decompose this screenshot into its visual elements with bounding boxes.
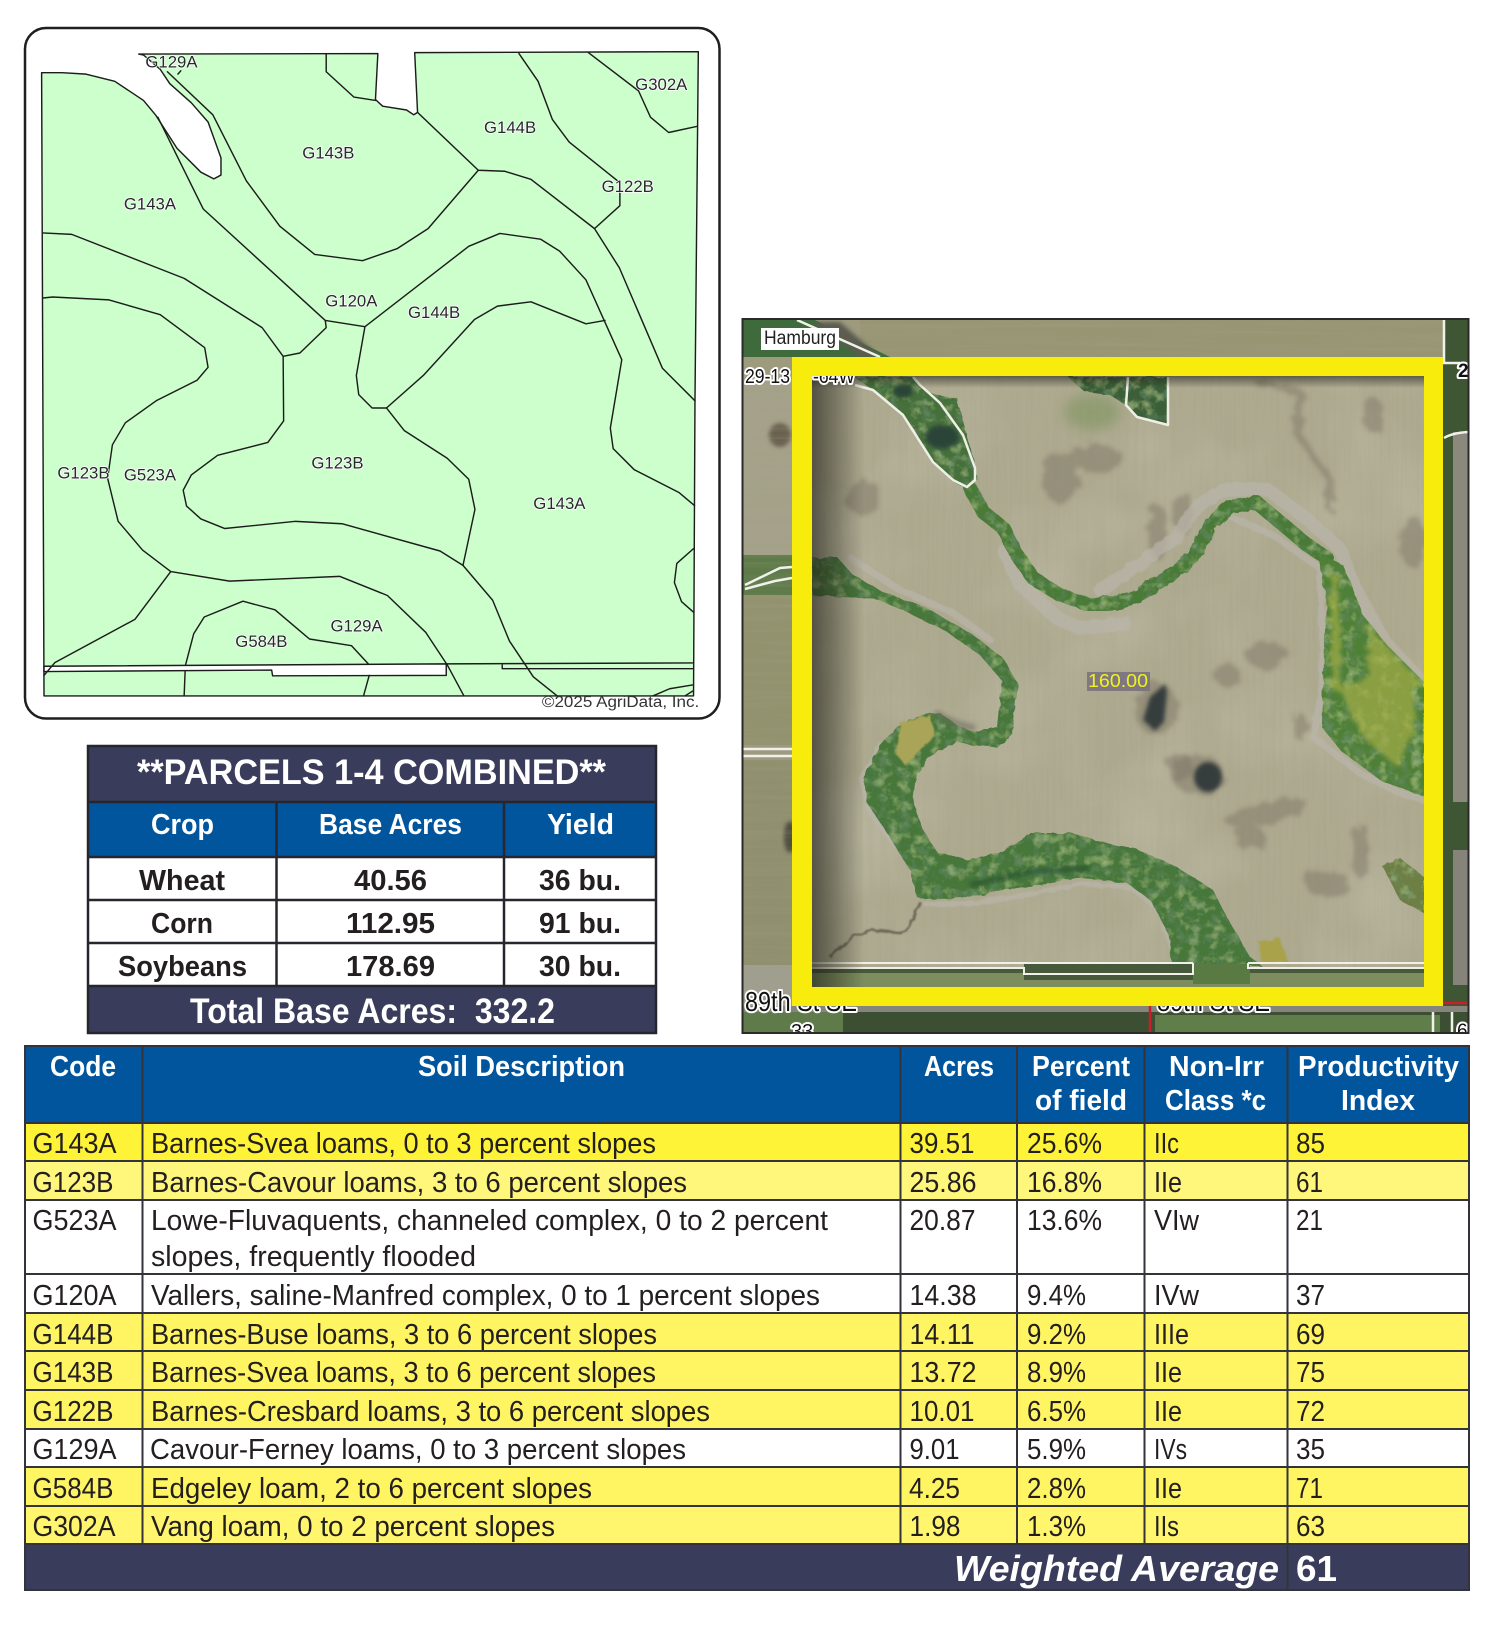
row: G584B: IIe xyxy=(1154,1473,1182,1505)
row: G144B: 14.11 xyxy=(910,1319,974,1351)
row: G584B: 2.8% xyxy=(1027,1473,1086,1505)
row: G302A xyxy=(32,1511,1325,1543)
soil code labels: G122B xyxy=(602,178,654,196)
ponds xyxy=(1143,684,1222,792)
row: G120A: 37 xyxy=(1296,1280,1325,1312)
row: G129A: Cavour-Ferney loams, 0 to 3 percent slopes xyxy=(150,1434,686,1466)
bottom strip xyxy=(843,1012,1443,1032)
row: G123B: IIe xyxy=(1154,1167,1182,1199)
row: G120A xyxy=(32,1280,1325,1312)
soil code labels: G144B xyxy=(484,119,536,137)
header labels: Class *c xyxy=(1165,1085,1266,1117)
row: wheat: Wheat xyxy=(139,865,225,897)
soil code labels: G123B xyxy=(57,464,110,482)
row: G120A: IVw xyxy=(1154,1280,1199,1312)
left strip xyxy=(743,375,793,560)
map text labels: 89th St SE xyxy=(745,986,857,1017)
map text labels: 2 xyxy=(1458,361,1469,382)
row: G143B: 13.72 xyxy=(910,1357,976,1389)
weighted average row: Weighted Average xyxy=(954,1548,1279,1589)
wetland dark channel xyxy=(970,868,1090,885)
row: G584B xyxy=(32,1473,1323,1505)
river banks xyxy=(850,489,1424,950)
wetland yellow highlight xyxy=(897,715,935,765)
south-east wet spot xyxy=(1383,858,1424,913)
row backgrounds xyxy=(25,1046,1469,1590)
header labels: Soil Description xyxy=(418,1051,625,1083)
row: soybeans xyxy=(118,951,621,983)
row: G120A: 9.4% xyxy=(1027,1280,1086,1312)
row: G129A xyxy=(32,1434,1325,1466)
table title xyxy=(88,746,656,802)
row: G584B: 4.25 xyxy=(909,1473,960,1505)
roads and section lines xyxy=(743,320,1468,1032)
row: G302A: Vang loam, 0 to 2 percent slopes xyxy=(151,1511,555,1543)
north-east gully xyxy=(1255,382,1330,512)
panel: aerial photo xyxy=(742,319,1469,1043)
row: G129A: IVs xyxy=(1154,1434,1187,1466)
header labels: Non-Irr xyxy=(1169,1051,1264,1083)
Hamburg label: Hamburg xyxy=(764,328,836,349)
row: G523A: VIw xyxy=(1154,1205,1199,1237)
eastern wetland highlights xyxy=(1330,575,1423,767)
row: G143A xyxy=(32,1128,1325,1160)
header labels: Percent xyxy=(1032,1051,1130,1083)
map text labels: 6 xyxy=(1457,1021,1468,1042)
row: G122B: 72 xyxy=(1296,1396,1325,1428)
header row: Crop xyxy=(151,809,214,841)
total row xyxy=(88,986,656,1033)
surrounding land xyxy=(743,320,1468,1032)
row: G302A: 63 xyxy=(1296,1511,1325,1543)
soil boundaries xyxy=(43,53,697,696)
aerial frame xyxy=(742,319,1468,1033)
header labels: Code xyxy=(50,1051,116,1083)
right strip xyxy=(1443,320,1468,1032)
row: G129A: 9.01 xyxy=(910,1434,960,1466)
header labels xyxy=(50,1051,1459,1117)
row: corn: 91 bu. xyxy=(539,908,621,940)
soil code labels: G143B xyxy=(302,144,354,162)
header row xyxy=(88,802,656,857)
field base xyxy=(812,376,1424,987)
wooded patch north-west xyxy=(855,377,978,488)
yellow parcel outline xyxy=(792,357,1443,1006)
row: G523A xyxy=(32,1205,1323,1273)
row: G302A: IIs xyxy=(1154,1511,1179,1543)
soil code labels: G129A xyxy=(331,617,383,635)
soil code labels xyxy=(57,53,687,651)
wooded patch north xyxy=(1068,377,1168,425)
row: G122B: IIe xyxy=(1154,1396,1182,1428)
row: G123B: 61 xyxy=(1296,1167,1323,1199)
row: G123B: 16.8% xyxy=(1027,1167,1102,1199)
row: G523A: 13.6% xyxy=(1027,1205,1102,1237)
row: G129A: 5.9% xyxy=(1027,1434,1086,1466)
row: G523A: 21 xyxy=(1296,1205,1323,1237)
field interior xyxy=(812,376,1426,987)
field area xyxy=(42,52,698,696)
row: G143B xyxy=(32,1357,1325,1389)
row: G129A: 35 xyxy=(1296,1434,1325,1466)
row: G120A: 14.38 xyxy=(910,1280,976,1312)
row: G143A: 39.51 xyxy=(910,1128,974,1160)
map frame xyxy=(25,28,720,718)
row: G143A: G143A xyxy=(32,1128,116,1160)
soil code labels: G123B xyxy=(311,454,364,472)
row: G123B: Barnes-Cavour loams, 3 to 6 percent slopes xyxy=(151,1167,687,1199)
road cutout xyxy=(44,664,446,676)
row: G120A: Vallers, saline-Manfred complex, 0 to 1 percent slopes xyxy=(151,1280,820,1312)
row: G523A: G523A xyxy=(32,1205,116,1237)
weighted average row: 61 xyxy=(1296,1548,1337,1589)
aerial image xyxy=(743,320,1469,1043)
soil patches xyxy=(845,397,1426,897)
header labels: Productivity xyxy=(1298,1051,1459,1083)
panel: soil table xyxy=(25,1046,1469,1590)
soil code labels: G120A xyxy=(325,293,378,311)
northern drainage xyxy=(970,488,1327,605)
row: G523A: Lowe-Fluvaquents, channeled complex, 0 to 2 percent xyxy=(151,1205,828,1237)
pale green patch xyxy=(1064,394,1120,430)
header labels: Index xyxy=(1341,1085,1415,1117)
row: G143A: IIc xyxy=(1154,1128,1179,1160)
row: wheat: 36 bu. xyxy=(539,865,621,897)
wooded patch pools xyxy=(893,384,959,449)
panel: soil map xyxy=(25,28,720,718)
row: G144B: 9.2% xyxy=(1027,1319,1086,1351)
row: soybeans: 30 bu. xyxy=(539,951,621,983)
row: wheat xyxy=(139,865,621,897)
map text labels: 33 xyxy=(791,1021,813,1043)
row: G143B: Barnes-Svea loams, 3 to 6 percent slopes xyxy=(151,1357,656,1389)
acreage label: 160.00 xyxy=(1088,671,1148,691)
row: G523A: 20.87 xyxy=(910,1205,976,1237)
row: corn: Corn xyxy=(151,908,213,940)
row: soybeans: Soybeans xyxy=(118,951,247,983)
soil code labels: G584B xyxy=(235,633,287,651)
row: G123B: 25.86 xyxy=(910,1167,976,1199)
row: G144B: 69 xyxy=(1296,1319,1325,1351)
row: G123B: G123B xyxy=(32,1167,114,1199)
table title: **PARCELS 1-4 COMBINED** xyxy=(137,753,606,792)
row: corn xyxy=(151,908,621,940)
panel: base acres table xyxy=(88,746,656,1033)
edge shadows xyxy=(812,376,864,987)
row: G144B: IIIe xyxy=(1154,1319,1189,1351)
copyright: ©2025 AgriData, Inc. xyxy=(542,694,699,711)
row: G123B xyxy=(32,1167,1323,1199)
row: G584B: G584B xyxy=(32,1473,114,1505)
hedge xyxy=(812,964,1424,980)
soil code labels: G143A xyxy=(124,195,176,213)
row: G143B: G143B xyxy=(32,1357,114,1389)
eastern wetland xyxy=(1318,553,1424,797)
row: G143A: 25.6% xyxy=(1027,1128,1102,1160)
row: wheat: 40.56 xyxy=(354,865,427,897)
row: G523A: slopes, frequently flooded xyxy=(151,1241,476,1273)
row: G144B: G144B xyxy=(32,1319,114,1351)
row: soybeans: 178.69 xyxy=(346,951,435,983)
top-left wooded corner xyxy=(743,320,890,357)
row: G302A: 1.3% xyxy=(1027,1511,1086,1543)
soil code labels: G523A xyxy=(124,467,176,485)
row: corn: 112.95 xyxy=(346,908,435,940)
row: G122B: 6.5% xyxy=(1027,1396,1086,1428)
header labels: Acres xyxy=(924,1051,994,1083)
row: G129A: G129A xyxy=(32,1434,116,1466)
field boundary lines xyxy=(812,963,1424,974)
row: G143B: IIe xyxy=(1154,1357,1182,1389)
header row: Base Acres xyxy=(319,809,462,841)
western drainage xyxy=(812,557,1262,966)
soil code labels: G302A xyxy=(635,76,687,94)
row: G143A: Barnes-Svea loams, 0 to 3 percent slopes xyxy=(151,1128,656,1160)
row: G120A: G120A xyxy=(32,1280,116,1312)
row: G143B: 75 xyxy=(1296,1357,1325,1389)
map text labels: 29-13 xyxy=(745,366,790,388)
header labels: of field xyxy=(1035,1085,1127,1117)
soil code labels: G144B xyxy=(408,304,460,322)
row: G122B xyxy=(32,1396,1325,1428)
row: G143B: 8.9% xyxy=(1027,1357,1086,1389)
row: G144B: Barnes-Buse loams, 3 to 6 percent slopes xyxy=(151,1319,657,1351)
soil map drawing xyxy=(42,52,699,711)
soil code labels: G143A xyxy=(533,495,586,513)
row: G302A: G302A xyxy=(32,1511,116,1543)
pond halos xyxy=(1134,682,1224,795)
gully xyxy=(830,902,920,957)
header row: Yield xyxy=(547,809,614,841)
map text labels: 89th St SE xyxy=(1157,986,1270,1017)
row: G584B: Edgeley loam, 2 to 6 percent slopes xyxy=(151,1473,592,1505)
row: G584B: 71 xyxy=(1296,1473,1323,1505)
row: G144B xyxy=(32,1319,1325,1351)
map text labels xyxy=(745,361,1469,1043)
row: G122B: G122B xyxy=(32,1396,114,1428)
total row: Total Base Acres: 332.2 xyxy=(190,992,555,1031)
soil code labels: G129A xyxy=(145,53,198,71)
row: G143A: 85 xyxy=(1296,1128,1325,1160)
row: G122B: Barnes-Cresbard loams, 3 to 6 percent slopes xyxy=(151,1396,710,1428)
map text labels: -64W xyxy=(813,366,855,388)
row: G302A: 1.98 xyxy=(910,1511,960,1543)
row: G122B: 10.01 xyxy=(910,1396,974,1428)
bottom green strip xyxy=(812,973,1424,987)
